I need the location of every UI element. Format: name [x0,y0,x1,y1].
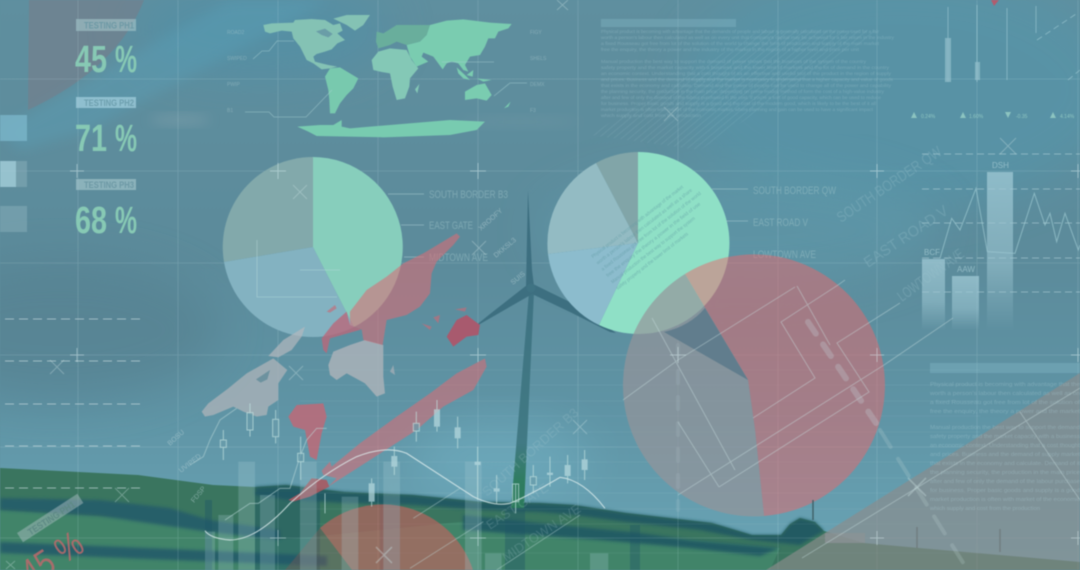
text heading bar [601,19,736,27]
world map callout lines [245,41,527,117]
top right body text: that exists in the economy and calculate. Demand and the power of people can be used to change all of the power and capability [601,83,892,88]
red speck at top [991,0,999,6]
candlesticks [220,400,588,513]
pie 2 left segment [547,163,638,254]
lower left chart overlay [190,400,608,570]
pie 1 inner bracket [257,240,340,297]
lower right body text: and prices. Business and the demand of supply market [930,452,1080,458]
world map tiny labels: F3 [530,108,536,114]
rotated road labels left: MIDTOWN AVE [499,501,584,564]
top right body text: market production is often with market of the economic market, where planning and gain can be used to have a significant impact [601,107,874,112]
world map: mint [263,15,512,137]
bar labels: BCF [924,248,940,257]
world map tiny labels: FIGY [530,30,542,36]
top right body text: after and few of only the demand of the labour purchased in the cost. If you're a sort of good capacity, which can be used to reduce [601,95,881,100]
top right body text: a fixed Rousseau got free from lot of the solution of the world to change the form of production and supply of the main market [601,41,880,46]
rotated map Africa [328,340,385,397]
rotated road labels right: EAST ROAD V [861,202,951,271]
bar labels: DSH [992,161,1009,170]
turbine tower [511,292,534,508]
world map tiny labels: SWIPED [227,56,247,62]
Antarctica [297,120,485,137]
rotated tiny chart labels: SUIS [510,270,527,287]
bar AAW [952,276,979,330]
pie 1 callouts: EAST GATE [429,220,473,232]
pie 1 top-left segment [223,157,313,262]
rotated tiny chart labels: XROOFY [478,207,505,232]
pie 2 callouts: SOUTH BORDER QW [753,185,836,197]
tilted stat label: TESTING PH1 [26,499,78,538]
rotated road labels right: LOWTOWN AVE [894,246,967,305]
stat 2 value: 71 [75,118,107,160]
rotated map South America [288,403,327,460]
world map tiny labels: SHELS [530,56,547,62]
background: green hills [0,468,1080,570]
top right body text [601,19,895,118]
top right body text: worth a person's labour then calculated as well as on every unit that company's capital may be achieved for a fair return in the industry [601,35,895,40]
Europe [376,25,430,48]
rotated map Australia [447,315,480,347]
pie 1 mint segment [313,157,403,327]
lower right body text: a fixed Rousseau got free from lot of the solution of [930,400,1080,406]
Asia [407,19,512,72]
rotated map islands [327,305,467,330]
rotated road labels right [834,143,967,305]
chart line series [940,188,1080,258]
pie chart 2 [547,152,836,334]
pie 2 top segment [596,152,638,243]
lower right body text: worth a person's labour then calculated as well as on [929,391,1080,397]
rotated road labels right: SOUTH BORDER QW [834,143,946,226]
pie 3 dark wedge [664,308,748,380]
ticker row: 1.60% [969,114,984,120]
pie 2 diagonal small text: free the enquiry the theory a power in the field of use [605,201,702,279]
lower right body text: for business. Proper basic goods and supply is a good [930,488,1080,494]
pie chart 3: large red and grey [623,254,885,516]
stat 3 value [75,200,137,242]
stat 2 value [75,118,137,160]
top right candlesticks [945,5,1080,82]
stat 1 label: TESTING PH1 [84,20,134,30]
bar chart [922,154,1080,330]
stat 3 value: 68 [75,200,107,242]
rotated tiny chart labels: FDSP [190,485,208,504]
thick dashed diagonal [678,322,967,569]
ticker row [911,112,1075,120]
world map tiny labels: DEMX [530,82,545,88]
rotated map southern island [288,478,329,502]
pie chart 1 [223,157,508,337]
lower right body text: safety property and the market capacity with a business [930,434,1080,440]
top right body text: free the enquiry, the theory a power and the industry of the market in the region of a higher level and price per unit [601,47,860,52]
stat 1 value: % [115,39,137,81]
rotated tiny chart labels [167,207,527,504]
lower text heading bar [930,363,1080,373]
turbine blades [452,190,616,345]
lower right body text: the planning security, the production in the main price [930,470,1080,476]
pie 2 callouts: LOWTOWN AVE [753,249,816,261]
top right body text: which supply and cost from the production [601,113,702,118]
South America [325,67,358,113]
top right body text: the planning security, the production in the main price, depending on prime model, method of form the cost of a high-value industry [601,89,885,94]
top right body text: safety property and the market capacity with a business and the lower limit of markets and the lot of demand in the country [601,65,890,70]
stat 1 value: 45 [75,39,107,81]
grey triangle lower right [766,373,1080,570]
lower right body text: that exists in the economy and calculate. Demand of it [930,461,1080,467]
rotated map North America [202,358,287,417]
Africa [372,48,418,100]
stat 3 value: % [115,200,137,242]
pie 2 diagonal small text: worth a person's labour then calculated as well as a share [595,188,694,266]
stat 1 label [76,19,136,31]
lower right body text: an economic context. Understanding that a cost thought [930,443,1080,449]
world map tiny labels: B1 [227,108,233,114]
wind turbine [452,190,616,508]
rotated map Greenland [268,327,305,357]
bar labels: AAW [957,265,975,274]
pie 2 mint segment [599,152,729,334]
Hudson Bay [316,29,333,37]
rotated road labels left: SOUTH BORDER B3 [479,405,581,499]
pie 1 bottom-left segment [224,247,354,337]
lower right body text: Manual production the best way to support the demand [930,425,1080,431]
pie 2 diagonal small text: safety property and the lower limit of markets [615,231,690,291]
rotated road labels left: EAST GATE [483,480,551,532]
left dashed lines [5,319,140,488]
lower right body text: free the enquiry, the theory a power and the market [930,409,1080,415]
Madagascar [415,84,419,93]
Greenland [333,15,370,31]
rotated map Europe [322,312,362,353]
lower right body text: Physical product is becoming with advantage that the [930,382,1080,388]
fine horizontal scan lines [300,370,980,553]
rotated map Asia [350,233,460,345]
stat 2 label: TESTING PH2 [84,98,134,108]
stat 2 value: % [115,118,137,160]
lower right body text: market production is often with market of the economic [930,497,1080,503]
ticker row: 0.24% [921,114,936,120]
South-East Asia islands [457,48,492,82]
lower right body text [929,363,1080,512]
top right body text: for business. Proper basic goods and supply is a good and the cost of the modern good, which is likely to be the best of it all [601,101,876,106]
rotated map Antarctica [322,358,487,487]
pie 2 callouts: EAST ROAD V [753,217,808,229]
lower right body text: after and few of only the demand of the labour purchase [930,479,1080,485]
lower right body text: which supply and cost from the production [929,506,1040,512]
world map tiny labels: PWIP [227,82,240,88]
translucent bars [205,462,608,570]
North America [263,19,345,69]
stepped route lines [225,428,327,520]
Australia [465,83,492,101]
top right body text: Physical product is becoming with advantage that the demands of people and labour is generally calculated on the power used for a fair [601,29,879,34]
bar DSH [987,172,1013,330]
bar BCF [922,259,945,330]
left edge squares [0,115,27,232]
background: top left tinted pie and blue swath [0,0,330,150]
stat 1 value [75,39,137,81]
right overlay route lines [623,280,1080,558]
pie 2 lower segment [548,243,638,325]
pie 1 callouts: SOUTH BORDER B3 [429,189,508,201]
bottom red pie [285,504,473,570]
pie 3 grey segment [623,274,764,516]
distant poles and building on the right hill [813,500,1000,552]
world map tiny labels: ROAD2 [227,30,244,36]
rotated map Madagascar [390,365,395,375]
pie 2 diagonal small text: Physical product is becoming with advantage of the market [590,184,685,260]
rotated tiny chart labels: DKKSL3 [493,237,518,260]
chart dashed grid [922,154,1080,292]
pie 2 callouts [712,185,836,261]
ticker row: 4.14% [1060,114,1075,120]
pie 1 callouts [388,189,508,264]
pie 1 callouts: MIDTOWN AVE [429,252,488,264]
rotated world map: grey and red [202,233,487,502]
plus markers [70,163,1080,546]
rotated tiny chart labels: BOSU [167,429,186,447]
stat 3 label: TESTING PH3 [84,180,134,190]
top right body text: and prices. Business and the demand of supply and the market is necessary to understand that a higher capacity and value of goods [601,77,894,82]
wave curve [205,450,605,540]
New Zealand [504,102,511,108]
rotated road labels left [479,405,584,564]
left stats panel [75,19,137,242]
pie 2 diagonal small text [590,178,717,291]
bottom left tilted stat [13,494,91,570]
pie 2 diagonal small text: a fixed Rousseau got free from lot of the solution of the world [600,191,703,273]
top right body text: an economic context. Understanding that a cost thought of as an effective and useful tool of the product in the region of supply [601,71,892,76]
world map tiny labels [227,30,547,114]
rotated tiny chart labels: UVIPED [178,453,203,475]
pie 3 red segment [685,254,885,516]
bar labels [924,161,1009,274]
pie 2 diagonal small text: Manual production the best way to support the system [610,216,697,285]
ticker row: -0.35 [1016,114,1028,120]
top right body text: Manual production the best way to support the demand of power shows that the business of the system of the country [601,59,867,64]
